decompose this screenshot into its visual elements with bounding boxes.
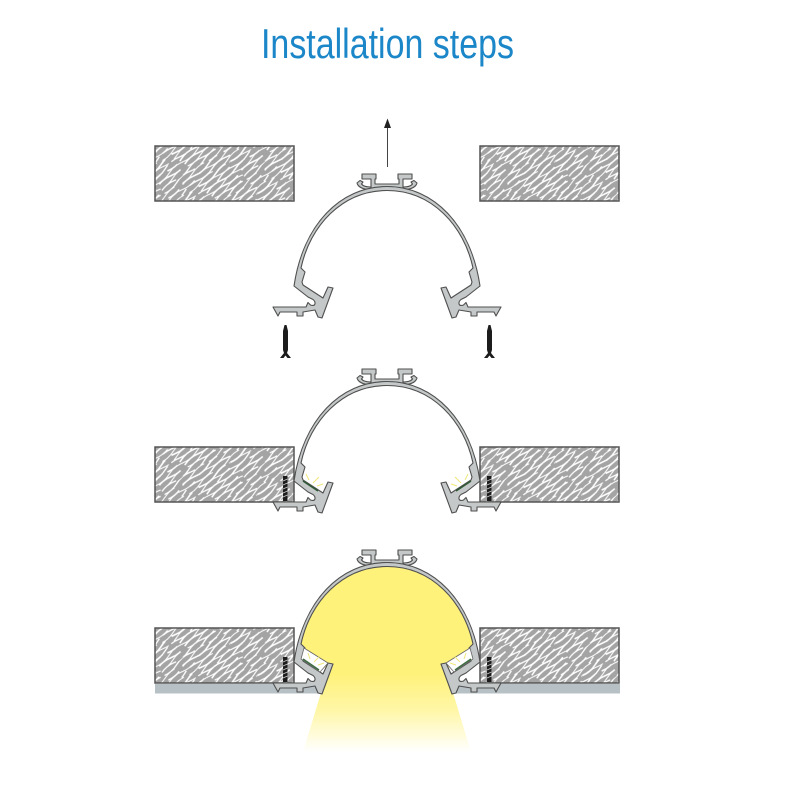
wall panel: left [155,628,294,683]
wall panel: left [155,447,294,502]
plaster strip: right [454,684,620,694]
icon: right screw [484,325,495,358]
icon: left screw [283,657,288,682]
plaster strip: left [155,684,320,694]
icon: right screw [487,476,492,501]
wall panel: right [480,628,619,683]
profile: aluminium channel [273,369,501,513]
LED strip: right [451,474,471,491]
light beam [298,565,476,752]
profile: aluminium channel [273,174,501,318]
LED module: left [301,648,328,672]
step 1: profile lifted out of the ceiling gap [155,118,619,358]
LED module: right [446,648,473,672]
title: Installation steps [261,20,514,67]
icon: left screw [283,476,288,501]
wall panel: right [480,447,619,502]
profile: aluminium channel [273,550,501,694]
LED strip: left [303,474,323,491]
step 2: profile fixed into the ceiling gap [155,369,619,513]
wall panel: right [480,146,619,201]
wall panel: left [155,146,294,201]
arrow: upward [384,118,391,167]
icon: right screw [487,657,492,682]
step 3: installed profile with cover and light [155,550,620,752]
icon: left screw [280,325,291,358]
white gap behind brackets [295,662,479,683]
